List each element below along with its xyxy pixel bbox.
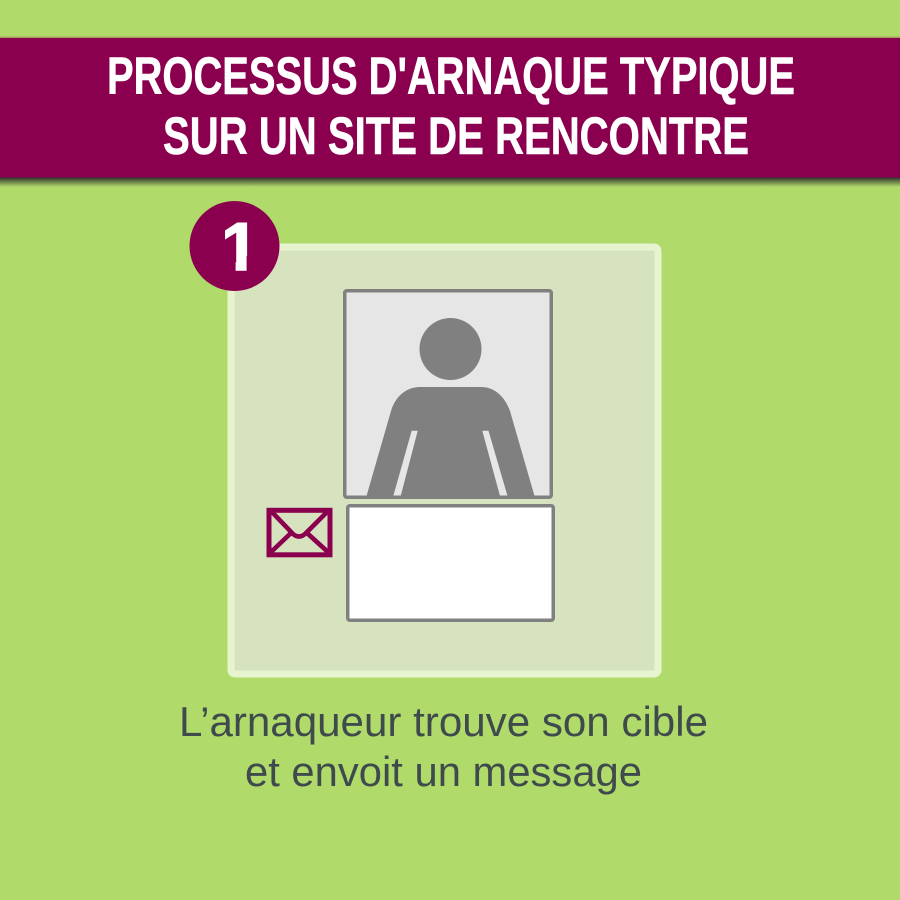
message box bbox=[348, 506, 553, 620]
icon: envelope bbox=[269, 510, 330, 555]
caption: L’arnaqueur trouve son cible bbox=[179, 698, 708, 745]
caption: et envoit un message bbox=[245, 748, 642, 795]
title banner bbox=[0, 36, 900, 187]
panel: step card bbox=[231, 247, 658, 674]
caption bbox=[179, 698, 708, 795]
profile photo bbox=[345, 291, 551, 497]
step number badge: 1 bbox=[221, 209, 259, 285]
icon: person bbox=[366, 318, 534, 496]
step number badge bbox=[190, 201, 280, 291]
